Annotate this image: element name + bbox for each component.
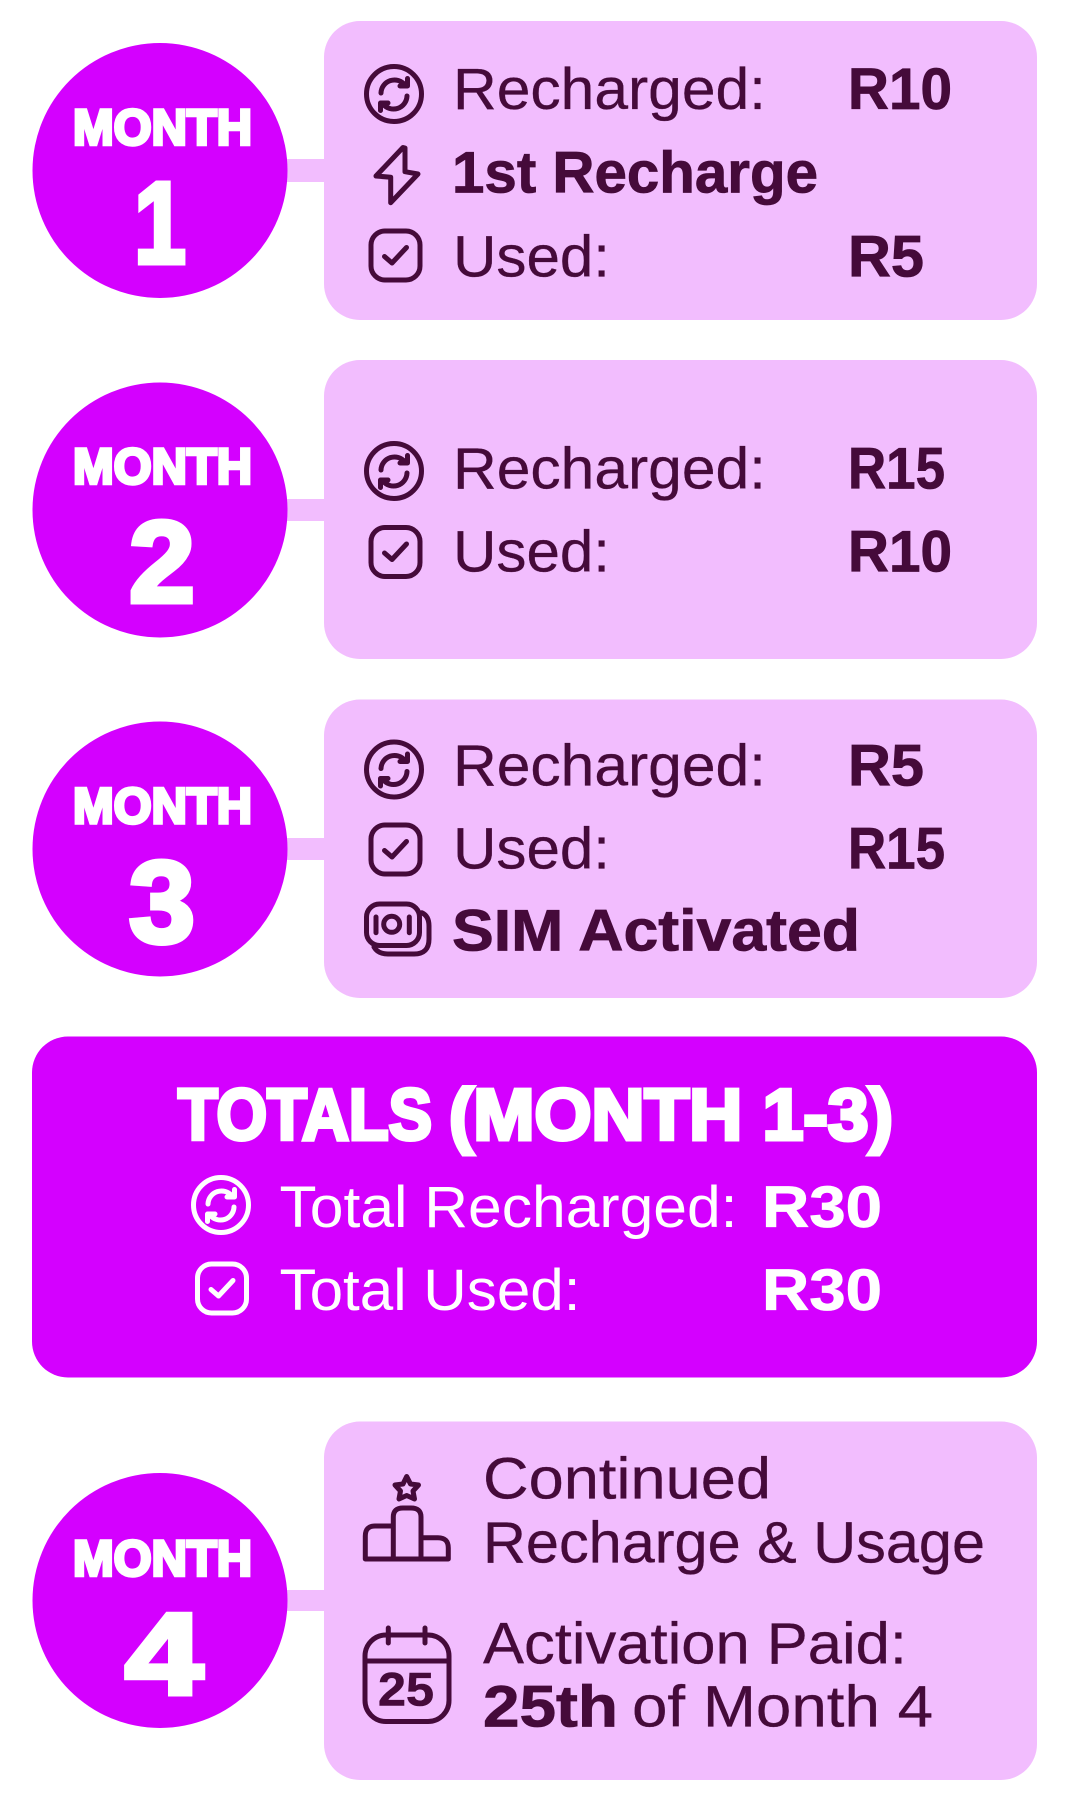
connector: month 4 xyxy=(285,1590,330,1611)
icon: calendar 25: 25 xyxy=(378,1663,434,1716)
text: used: Used: xyxy=(453,520,610,584)
panel: totals xyxy=(32,1036,1037,1378)
text: continued recharge and usage: Recharge & Usage xyxy=(483,1510,985,1576)
icon: recharge xyxy=(194,1178,248,1232)
text: activation paid: 25th xyxy=(483,1674,618,1740)
text: recharged: Recharged: xyxy=(453,734,766,798)
text: SIM activated: SIM Activated xyxy=(452,898,860,964)
card: month 2 details xyxy=(324,360,1037,659)
text: activation paid xyxy=(483,1612,933,1740)
icon: SIM banknote xyxy=(366,904,429,954)
value: R5: R5 xyxy=(848,734,924,798)
circle badge: month 3: MONTH xyxy=(73,778,252,834)
text: continued recharge and usage xyxy=(483,1446,985,1576)
circle badge: month 2 xyxy=(32,382,288,638)
circle badge: month 1 xyxy=(32,43,288,298)
value: R15: R15 xyxy=(848,436,945,502)
icon: checkbox xyxy=(371,825,420,874)
icon: recharge xyxy=(366,742,422,797)
circle badge: month 4 xyxy=(32,1473,288,1728)
value: R30: R30 xyxy=(762,1175,882,1240)
heading: totals xyxy=(178,1076,893,1156)
panel: month 2 xyxy=(32,360,1037,659)
circle badge: month 2: MONTH xyxy=(73,438,252,494)
connector: month 1 xyxy=(285,159,330,182)
value: R5: R5 xyxy=(848,224,924,290)
card: month 3 details xyxy=(324,700,1037,998)
heading: totals: TOTALS xyxy=(178,1076,432,1156)
text: activation paid: of Month 4 xyxy=(632,1674,933,1740)
icon: calendar 25 xyxy=(365,1628,449,1722)
text: 1st recharge: 1st Recharge xyxy=(452,140,818,206)
text: used: Used: xyxy=(453,224,610,290)
panel: month 4 xyxy=(32,1422,1037,1780)
value: R10: R10 xyxy=(848,520,952,584)
card: month 1 details xyxy=(324,21,1037,320)
icon: recharge xyxy=(366,66,422,122)
value: R10: R10 xyxy=(848,57,952,122)
icon: recharge xyxy=(366,444,422,498)
text: total recharged: Total Recharged: xyxy=(280,1175,738,1240)
value: R15: R15 xyxy=(848,816,945,882)
circle badge: month 2: 2 xyxy=(129,497,195,627)
icon: checkbox xyxy=(198,1264,246,1313)
heading: totals: (MONTH 1-3) xyxy=(449,1076,893,1156)
card: month 4 details xyxy=(324,1422,1037,1780)
text: recharged: Recharged: xyxy=(453,436,766,502)
icon: podium with star xyxy=(365,1476,448,1559)
circle badge: month 4: MONTH xyxy=(73,1530,252,1586)
circle badge: month 1: MONTH xyxy=(73,100,252,156)
text: activation paid: Activation Paid: xyxy=(483,1612,907,1676)
icon: lightning bolt xyxy=(376,148,418,203)
circle badge: month 1: 1 xyxy=(134,158,186,288)
text: recharged: Recharged: xyxy=(453,57,766,122)
circle badge: month 4: 4 xyxy=(125,1589,203,1719)
text: used: Used: xyxy=(453,816,610,882)
value: R30: R30 xyxy=(762,1258,882,1323)
panel: month 1 xyxy=(32,21,1037,320)
icon: checkbox xyxy=(371,231,420,280)
icon: checkbox xyxy=(371,528,420,576)
text: continued recharge and usage: Continued xyxy=(483,1446,771,1512)
text: total used: Total Used: xyxy=(280,1258,580,1323)
circle badge: month 3 xyxy=(32,722,288,976)
panel: month 3 xyxy=(32,700,1037,998)
circle badge: month 3: 3 xyxy=(129,837,195,967)
connector: month 3 xyxy=(285,838,330,860)
connector: month 2 xyxy=(285,499,330,521)
